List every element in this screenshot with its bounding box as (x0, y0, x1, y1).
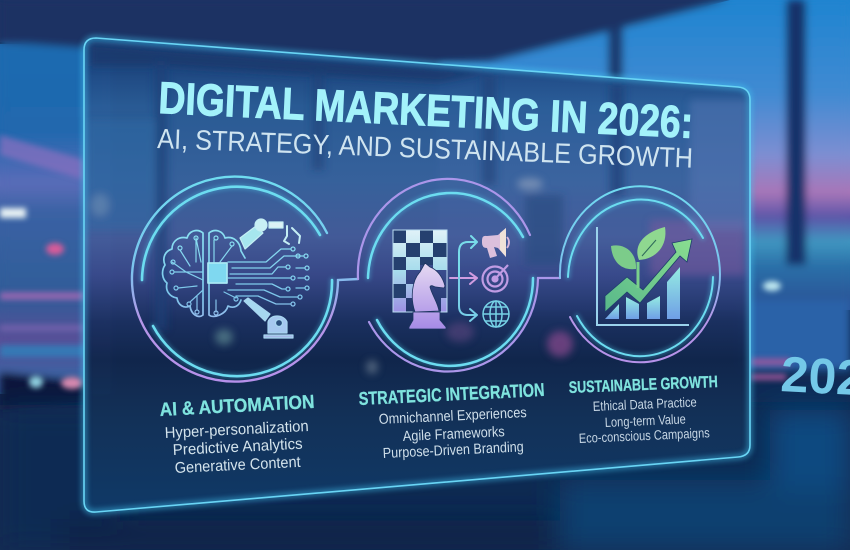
rings and connectors (132, 177, 720, 382)
heading: Strategic Integration: STRATEGIC INTEGRATION (358, 379, 545, 409)
brain chip (208, 263, 227, 283)
city lights (0, 135, 790, 389)
list: AI items (164, 418, 309, 477)
subtitle: AI, STRATEGY, AND SUSTAINABLE GROWTH (157, 123, 694, 174)
list: AI items: Hyper-personalization (164, 418, 309, 442)
list: strategy items (378, 405, 527, 462)
heading: Sustainable Growth: SUSTAINABLE GROWTH (568, 373, 718, 397)
panel reflections (86, 44, 748, 374)
icon: growth chart with sprout (597, 227, 692, 325)
ring: circle three inner (568, 200, 713, 356)
list: growth items: Eco-conscious Campaigns (578, 425, 710, 446)
floor (0, 405, 850, 550)
column one text (159, 392, 315, 477)
knight piece (409, 263, 446, 329)
panel: glass card (84, 38, 750, 512)
icon: megaphone (482, 228, 509, 258)
growth arrow (605, 239, 692, 312)
list: AI items: Predictive Analytics (172, 436, 303, 459)
ring: circle two outer (358, 179, 560, 372)
list: strategy items: Agile Frameworks (402, 424, 505, 445)
robot arm lower (244, 298, 293, 338)
heading: AI & Automation: AI & AUTOMATION (159, 392, 315, 421)
icon: target (482, 265, 508, 292)
channel arrows (450, 236, 477, 321)
column two text (358, 379, 545, 462)
icon: globe (483, 301, 509, 327)
ring: circle three outer (560, 186, 720, 362)
icon: chess board, knight and channels (393, 228, 509, 329)
panel glow (84, 38, 750, 512)
panel fill (84, 38, 750, 512)
title: DIGITAL MARKETING IN 2026: (158, 72, 694, 148)
circuit traces (228, 247, 309, 306)
ring: circle two inner (368, 193, 533, 366)
list: AI items: Generative Content (174, 454, 302, 477)
chart bars (605, 267, 680, 319)
column three text (568, 373, 718, 446)
sprout leaves (611, 227, 665, 288)
brain right hemisphere (209, 231, 245, 316)
panel border (84, 38, 750, 512)
list: strategy items: Purpose-Driven Branding (382, 439, 524, 462)
icon: AI brain with robot arms (163, 219, 309, 338)
list: growth items (578, 394, 710, 446)
list: growth items: Long-term Value (604, 411, 686, 430)
ring: circle one inner (142, 187, 332, 376)
list: strategy items: Omnichannel Experiences (378, 405, 527, 428)
brain traces (170, 236, 238, 315)
chess board (393, 230, 447, 312)
list: growth items: Ethical Data Practice (592, 394, 697, 414)
ring glow (142, 187, 713, 376)
chart axes (597, 227, 689, 325)
brain left hemisphere (163, 231, 203, 316)
robot arm upper (240, 219, 300, 249)
ring: circle one outer (132, 177, 358, 382)
